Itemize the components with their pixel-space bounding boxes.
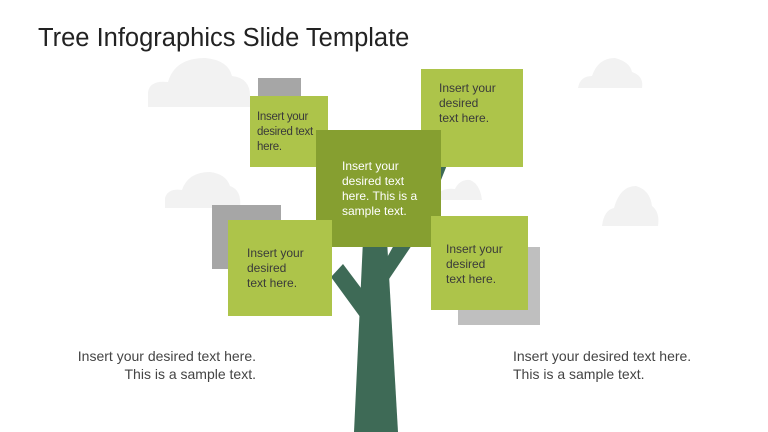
text: bottom left: This is a sample text. — [124, 366, 256, 382]
box: right: Insert your — [446, 242, 503, 256]
box: center: Insert your — [342, 159, 399, 173]
box: left: text here. — [247, 276, 297, 290]
box: left: desired — [247, 261, 286, 275]
title: Tree Infographics Slide Template — [38, 24, 409, 52]
text: bottom left: Insert your desired text here. — [78, 348, 256, 364]
text: bottom right: Insert your desired text here. — [513, 348, 691, 364]
box: top right: Insert your — [439, 81, 496, 95]
box: top left — [250, 96, 328, 167]
grey squares — [258, 78, 301, 98]
box: right — [431, 216, 528, 310]
text: bottom right: This is a sample text. — [513, 366, 644, 382]
text: bottom right — [513, 348, 691, 382]
text: bottom left — [78, 348, 256, 382]
box: right: desired — [446, 257, 485, 271]
box: top left: here. — [257, 141, 282, 153]
box: left: Insert your — [247, 246, 304, 260]
box: center: desired text — [342, 174, 404, 188]
box: center: sample text. — [342, 204, 407, 218]
box: top right: desired — [439, 96, 478, 110]
box: top right: text here. — [439, 111, 489, 125]
box: center — [316, 130, 441, 247]
box: left — [228, 220, 332, 316]
box: center: here. This is a — [342, 189, 417, 203]
tree — [331, 165, 447, 432]
box: top left: desired text — [257, 126, 313, 138]
box: top right — [421, 69, 523, 167]
box: right: text here. — [446, 272, 496, 286]
box: top left: Insert your — [257, 111, 308, 123]
